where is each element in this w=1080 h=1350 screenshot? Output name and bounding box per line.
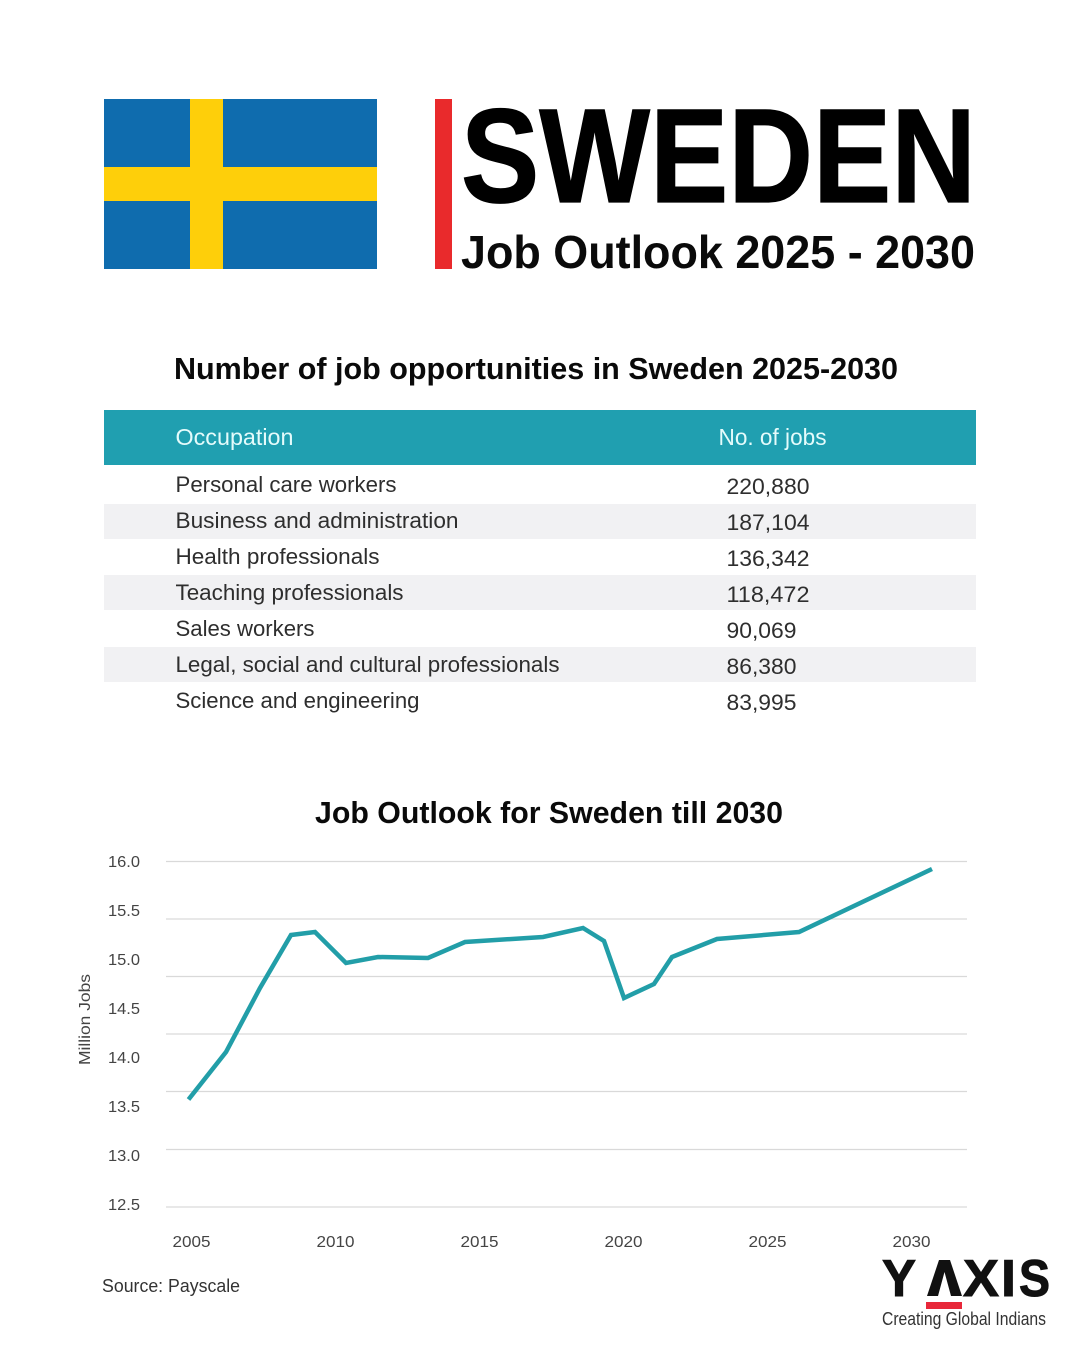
table row: Teaching professionals [104,575,976,610]
table row: Health professionals: Health professionals [176,544,380,569]
table row: Business and administration [104,504,976,539]
y-axis labels: 14.5 [108,1001,140,1018]
x-axis labels: 2015 [460,1234,499,1251]
table row: Sales workers: Sales workers [176,616,314,641]
table header: No. of jobs [718,424,826,450]
logo: Y-Axis: X [963,1250,999,1308]
table row: Science and engineering: 83,995 [726,690,796,715]
title: SWEDEN: SWEDEN [461,82,976,231]
logo: caret A [927,1260,962,1296]
x-axis labels: 2020 [604,1234,643,1251]
table row: Teaching professionals: 118,472 [726,582,810,607]
table row: Personal care workers: 220,880 [726,474,810,499]
table row: Health professionals [176,544,810,571]
logo tagline: Creating Global Indians [882,1309,1046,1329]
logo: Y-Axis [882,1250,1050,1329]
table row: Health professionals: 136,342 [726,546,810,571]
subtitle: Job Outlook 2025 - 2030 [461,226,975,278]
y-axis labels: 15.5 [108,903,140,920]
data line [188,869,932,1100]
heading: chart: Job Outlook for Sweden till 2030 [315,795,783,830]
table row: Legal, social and cultural professionals: Legal, social and cultural professionals [176,652,560,677]
table row: Personal care workers [176,472,810,499]
x-axis labels: 2025 [748,1234,787,1251]
heading: table: Number of job opportunities in Sweden 2025-2030 [174,351,898,386]
y-axis labels: 16.0 [108,854,140,871]
y-axis labels: 13.5 [108,1099,140,1116]
table: job opportunities [104,410,976,715]
table row: Science and engineering: Science and engineering [176,688,420,713]
table header: Occupation [176,424,294,450]
table row: Legal, social and cultural professionals: 86,380 [726,654,796,679]
y-axis labels: 15.0 [108,952,140,969]
source note: Source: Payscale [102,1276,240,1296]
table row: Science and engineering [176,688,796,715]
table row: Personal care workers: Personal care workers [176,472,396,497]
table row: Business and administration: Business and administration [176,508,458,533]
x-axis labels: 2030 [892,1234,931,1251]
y-axis labels: 12.5 [108,1197,140,1214]
table row: Legal, social and cultural professionals [104,647,976,682]
logo: Y-Axis: S [1019,1250,1050,1308]
logo: Y-Axis: Y [882,1250,916,1308]
y-axis labels [108,854,140,1214]
y-axis labels: 13.0 [108,1148,140,1165]
y-axis labels: 14.0 [108,1050,140,1067]
table row: Sales workers [176,616,796,643]
icon: Swedish flag [104,99,377,269]
logo: Y-Axis: I [1001,1250,1016,1308]
table row: Teaching professionals: Teaching professionals [176,580,404,605]
table header [104,410,976,465]
logo underline [926,1302,962,1309]
x-axis labels: 2010 [316,1234,355,1251]
y-axis title: Million Jobs [77,974,94,1065]
table row: Business and administration: 187,104 [726,510,810,535]
gridlines [166,862,967,1207]
red title bar [435,99,452,269]
x-axis labels: 2005 [172,1234,211,1251]
x-axis labels [172,1234,931,1251]
table row: Sales workers: 90,069 [726,618,796,643]
line chart: job outlook [77,854,967,1251]
